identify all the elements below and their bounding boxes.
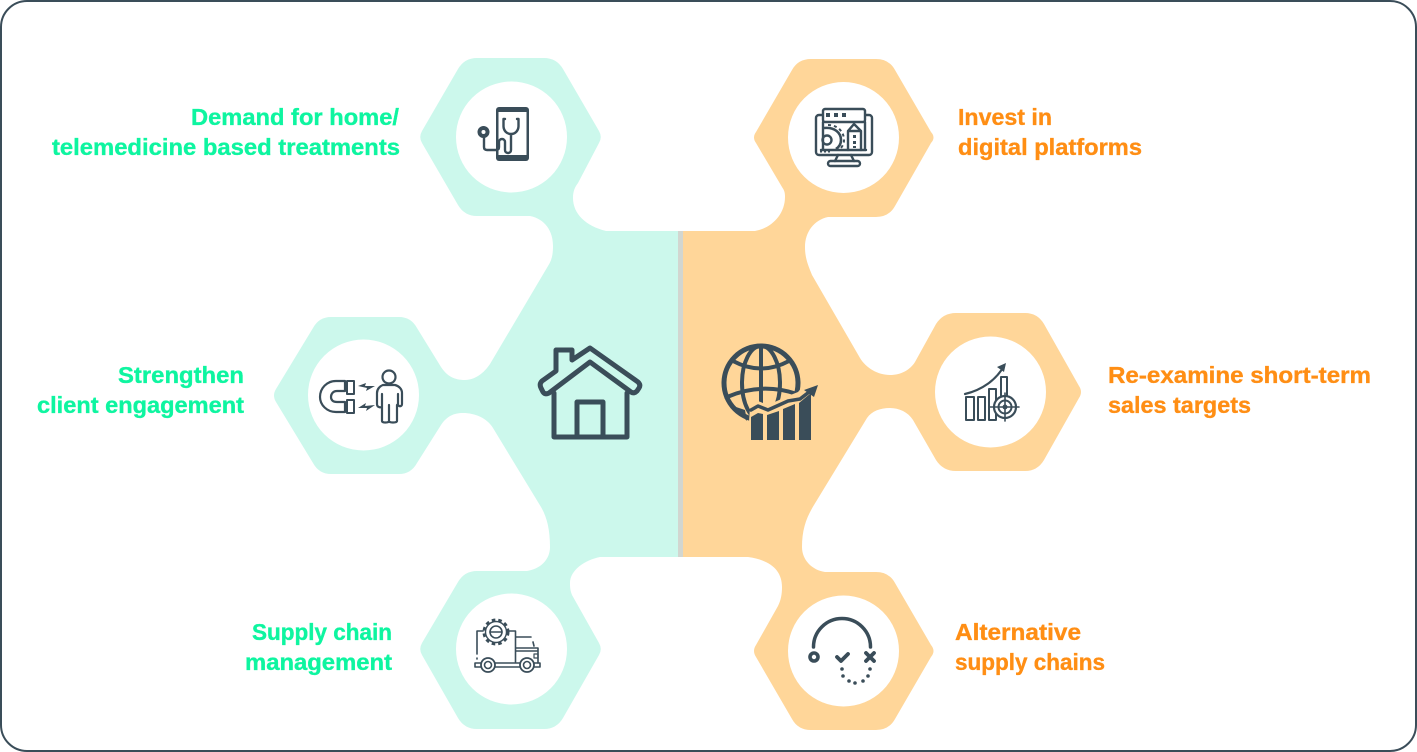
panel: right global branch xyxy=(683,59,1081,730)
label: client engagement: client engagement xyxy=(37,392,244,418)
label: sales targets: Re-examine short-term xyxy=(1108,362,1371,388)
label: alternative supply chains xyxy=(955,619,1105,675)
label: telemedicine: telemedicine based treatments xyxy=(52,134,400,160)
icon: bar chart with target xyxy=(965,363,1019,421)
circle: sales targets xyxy=(935,336,1046,448)
label: sales targets xyxy=(1108,362,1371,418)
label: alternative supply chains: Alternative xyxy=(955,619,1081,645)
circle: alternative supply chains xyxy=(788,596,899,706)
label: supply chain management: Supply chain xyxy=(252,619,392,645)
icon: phone with stethoscope xyxy=(480,107,529,161)
right branching hexagon shape xyxy=(683,59,1081,730)
icon: globe with rising chart xyxy=(724,346,822,445)
label: sales targets: sales targets xyxy=(1108,392,1251,418)
label: client engagement xyxy=(37,362,244,418)
icon: house xyxy=(540,348,640,437)
circle: supply chain management xyxy=(456,594,567,704)
label: supply chain management: management xyxy=(245,649,392,675)
circle: client engagement xyxy=(308,340,419,450)
label: supply chain management xyxy=(245,619,392,675)
circle: telemedicine xyxy=(456,82,567,192)
label: digital platforms: Invest in xyxy=(958,104,1052,130)
label: client engagement: Strengthen xyxy=(118,362,244,388)
icon: magnet and person xyxy=(320,370,402,422)
icon: alternative route xyxy=(810,618,874,685)
label: alternative supply chains: supply chains xyxy=(955,649,1105,675)
label: telemedicine xyxy=(52,104,400,160)
label: telemedicine: Demand for home/ xyxy=(191,104,400,130)
left branching hexagon shape xyxy=(274,58,679,729)
panel: left home branch xyxy=(274,58,679,729)
circle: digital platforms xyxy=(788,82,899,193)
label: digital platforms xyxy=(958,104,1142,160)
icon: web monitor xyxy=(816,109,872,166)
icon: truck with gear xyxy=(475,620,540,672)
label: digital platforms: digital platforms xyxy=(958,134,1142,160)
centre divider xyxy=(678,231,683,557)
